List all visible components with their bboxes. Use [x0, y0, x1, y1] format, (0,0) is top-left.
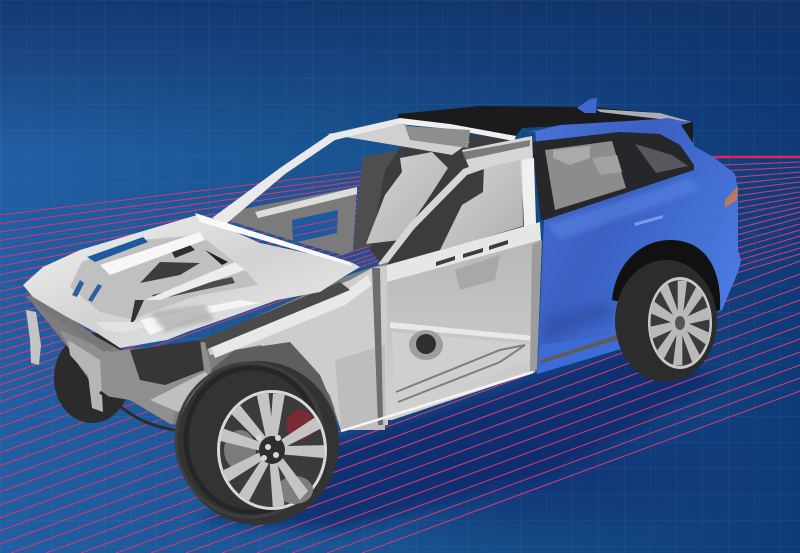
wheel arch liner	[205, 342, 335, 410]
bonnet	[23, 213, 360, 348]
front fender and inner structure	[195, 265, 388, 430]
rear side windows	[531, 132, 694, 220]
door frame arc	[381, 152, 522, 266]
front seats	[366, 152, 523, 250]
blue rear bodywork	[527, 118, 741, 374]
far front tyre	[54, 333, 130, 423]
front tyre	[176, 361, 339, 525]
driver door belt rail	[387, 222, 541, 283]
floor shadow under car	[200, 345, 720, 530]
cabin interior base	[370, 135, 536, 272]
front wheel	[176, 361, 339, 525]
roof antenna fin	[577, 98, 597, 113]
B-pillar with vents	[462, 136, 536, 232]
windscreen header and roof frame	[327, 118, 516, 155]
rear wheel	[615, 260, 717, 382]
front structure base	[30, 262, 388, 431]
engine bay and bumper beam	[25, 293, 215, 430]
black roof panel	[398, 106, 692, 136]
A-pillar	[212, 118, 400, 224]
pink perspective floor lines	[0, 157, 800, 553]
firewall and interior panel	[217, 150, 397, 255]
front rim	[217, 390, 327, 510]
driver door inner panel	[341, 240, 542, 431]
